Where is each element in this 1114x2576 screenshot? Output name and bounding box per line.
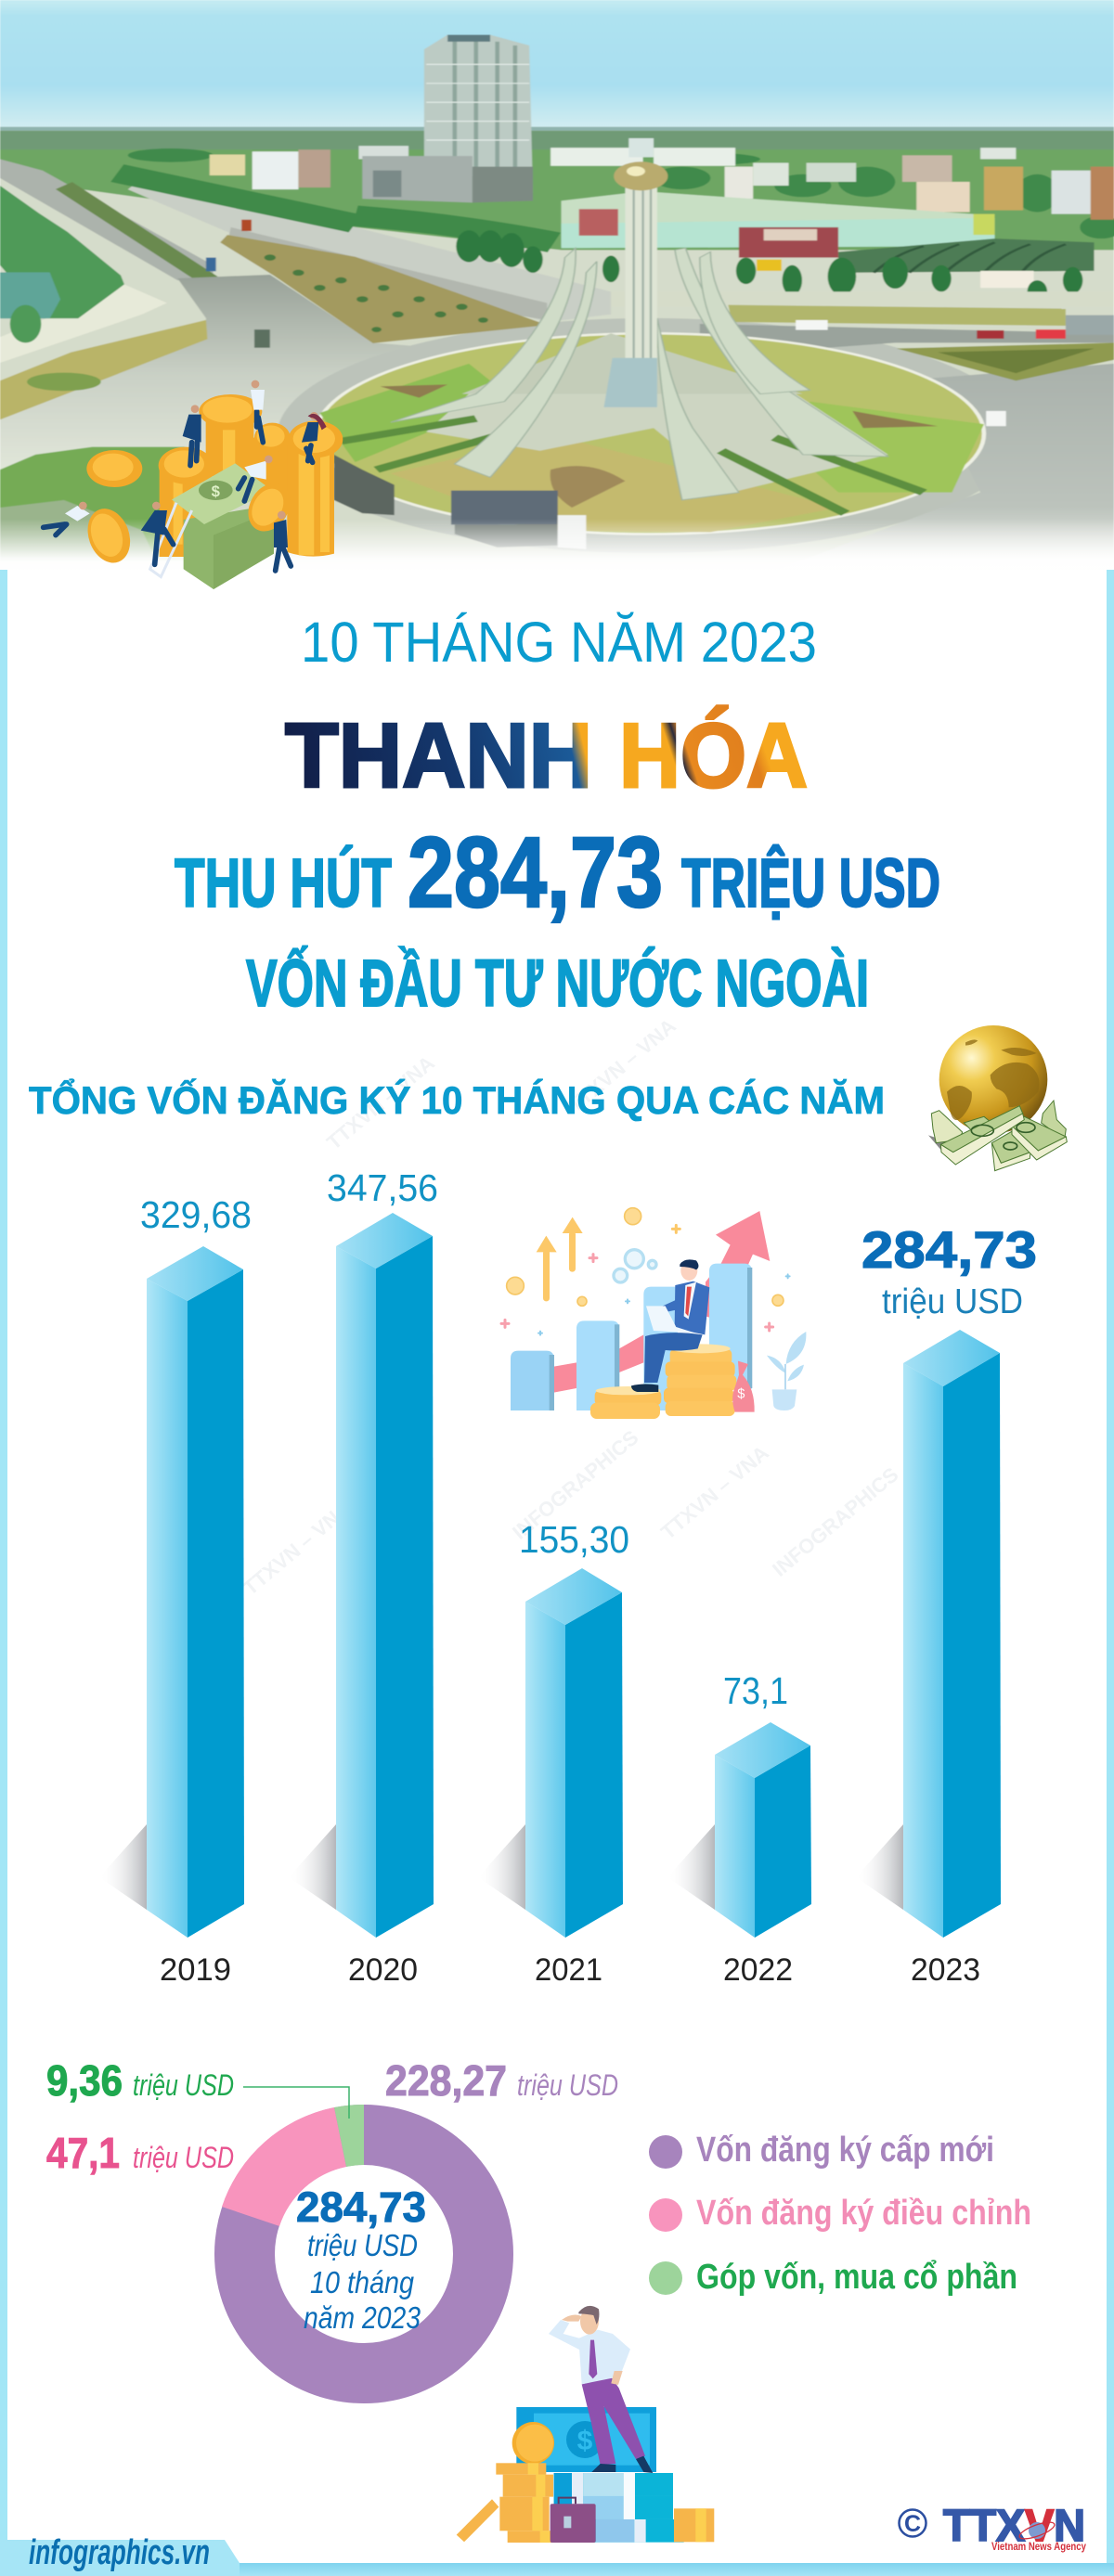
- callout: 9,36 million USD: 9,36: [46, 2056, 123, 2105]
- side borders: [0, 570, 1114, 2576]
- vehicles: [451, 491, 558, 524]
- bar 2021: 155,30: [519, 1518, 629, 1561]
- legend: Góp vốn, mua cổ phần: [696, 2258, 1017, 2297]
- bar 2022: [667, 1669, 811, 1988]
- icon: coin stacks, money block and business people: $: [212, 483, 221, 500]
- bar 2023: 2023: [911, 1952, 980, 1988]
- tree rows: [117, 174, 356, 224]
- icon: man standing on money and coins: $: [577, 2426, 593, 2456]
- headline: attracted 284.73 million USD: 284,73: [408, 816, 663, 928]
- donut chart: capital structure: [222, 2105, 483, 2374]
- infographic canvas: TTXVN – VNA: [563, 1014, 680, 1117]
- center total: 284,73: [296, 2183, 426, 2231]
- bar 2020: 347,56: [327, 1166, 438, 1209]
- callout: 47,1 million USD: 47,1: [46, 2129, 120, 2177]
- bar 2019: [99, 1193, 252, 1988]
- logo: TTXVN Vietnam News Agency: Vietnam News Agency: [991, 2540, 1086, 2553]
- bar 2023: triệu USD: [882, 1282, 1023, 1321]
- title: Thanh Hoa: THANH: [285, 704, 592, 806]
- main road junction: [0, 275, 469, 473]
- bar 2021: 2021: [535, 1952, 602, 1988]
- section heading: total registered capital: TỔNG VỐN ĐĂNG KÝ 10 THÁNG QUA CÁC NĂM: [29, 1076, 885, 1122]
- callout: 228,27 million USD: [385, 2056, 618, 2105]
- legend: [649, 2131, 1031, 2297]
- logo: TTXVN Vietnam News Agency: TTXVN: [943, 2502, 1085, 2551]
- callout: 47,1 million USD: triệu USD: [133, 2141, 234, 2174]
- bar 2023: 284,73: [861, 1220, 1037, 1279]
- bar 2021: [478, 1518, 629, 1988]
- headline: attracted 284.73 million USD: [175, 816, 940, 928]
- headline: attracted 284.73 million USD: THU HÚT: [175, 844, 392, 921]
- hedge rows: [838, 238, 1095, 273]
- monument: [391, 248, 888, 500]
- upper road and sidewalk: [128, 178, 611, 322]
- icon: businessman on coins with rising chart: $: [737, 1387, 745, 1402]
- roundabout lawn: [317, 333, 984, 535]
- center total: triệu USD: [307, 2228, 418, 2262]
- headline: foreign investment capital: VỐN ĐẦU TƯ NƯỚC NGOÀI: [246, 947, 869, 1021]
- infographic canvas: TTXVN – VNA: [239, 1497, 356, 1600]
- source: infographics.vn: infographics.vn: [29, 2533, 210, 2572]
- legend: Vốn đăng ký cấp mới: [696, 2131, 994, 2170]
- slice: adjusted capital: [222, 2107, 346, 2226]
- bar 2019: 329,68: [140, 1193, 252, 1236]
- infographic canvas: TTXVN – VNA: [656, 1441, 773, 1544]
- icon: man standing on money and coins: [457, 2306, 714, 2543]
- footer band: [0, 2563, 1114, 2576]
- title: Thanh Hoa: [285, 704, 808, 806]
- callout: 228,27 million USD: triệu USD: [517, 2068, 618, 2102]
- bar 2020: 2020: [348, 1952, 418, 1988]
- bar chart: registered capital by year: [99, 1166, 1037, 1988]
- title: Thanh Hoa: HÓA: [619, 704, 808, 806]
- bar 2019: 2019: [160, 1952, 231, 1988]
- bar 2023: [856, 1220, 1037, 1988]
- bar 2022: 73,1: [723, 1669, 788, 1712]
- icon: coin stacks, money block and business people: [44, 380, 343, 589]
- callout: 228,27 million USD: 228,27: [385, 2056, 507, 2105]
- center total: 10 tháng: [310, 2265, 415, 2299]
- callout: 9,36 million USD: [46, 2056, 349, 2119]
- photo: Thanh Hoa roundabout and city skyline: [0, 0, 1114, 594]
- icon: gold globe with money: [928, 1025, 1067, 1171]
- center total: [296, 2183, 426, 2335]
- icon: businessman on coins with rising chart: [501, 1208, 806, 1419]
- center total: năm 2023: [304, 2300, 421, 2335]
- infographic canvas: INFOGRAPHICS: [768, 1462, 902, 1581]
- headline: attracted 284.73 million USD: TRIỆU USD: [681, 844, 940, 921]
- mall: [562, 191, 994, 246]
- logo: TTXVN Vietnam News Agency: C: [904, 2511, 921, 2537]
- infographic canvas: TTXVN – VNA: [322, 1051, 439, 1154]
- callout: 47,1 million USD: [46, 2129, 234, 2177]
- title: time period: 10 THÁNG NĂM 2023: [301, 611, 817, 674]
- legend: Vốn đăng ký điều chỉnh: [696, 2194, 1031, 2233]
- road ring: [277, 318, 1023, 553]
- bushes lower left: [0, 447, 185, 560]
- tower: [424, 35, 533, 193]
- bar 2020: [289, 1166, 438, 1988]
- infographic canvas: INFOGRAPHICS: [508, 1425, 642, 1544]
- footer tab: [0, 2540, 240, 2576]
- bar 2022: 2022: [723, 1952, 793, 1988]
- slice: capital contribution: [334, 2105, 364, 2167]
- left side greenery: [0, 186, 124, 318]
- callout: 9,36 million USD: triệu USD: [133, 2068, 234, 2102]
